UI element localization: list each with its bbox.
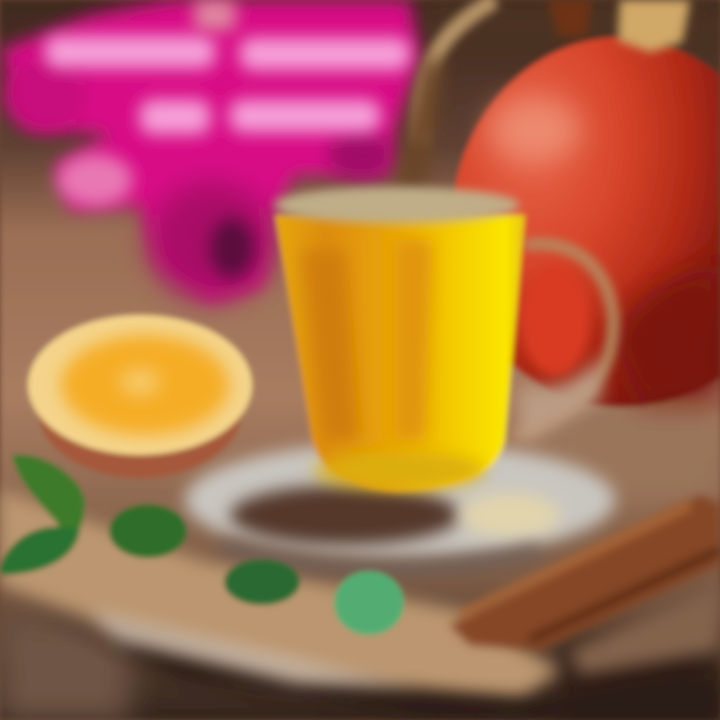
cinnamon sticks bbox=[450, 495, 720, 675]
glass of golden tea bbox=[275, 187, 525, 492]
burlap cloth under the saucer bbox=[0, 490, 720, 720]
saucer bbox=[185, 442, 615, 569]
blurred pale highlights on petals bbox=[45, 36, 410, 134]
pink flowers bbox=[0, 0, 420, 300]
tea being poured bbox=[395, 0, 495, 190]
mint leaves bbox=[0, 454, 404, 635]
pomegranate bbox=[452, 0, 720, 407]
orange slice bbox=[28, 315, 252, 478]
glass handle bbox=[515, 244, 613, 445]
